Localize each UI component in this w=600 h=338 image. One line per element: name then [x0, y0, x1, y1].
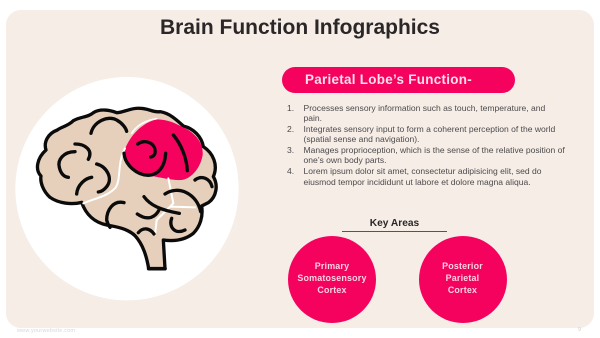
item 1: [287, 102, 545, 123]
brain outline: [37, 108, 216, 269]
item 2: Integrates sensory input to form a coherent perception of the world: [304, 124, 555, 134]
illustration: brain in white circle: [16, 77, 238, 300]
item 4: 4.: [287, 166, 294, 176]
parietal lobe highlight: [124, 119, 203, 180]
circle: Primary Somatosensory Cortex: Somatosensory: [297, 272, 367, 282]
item 4: Lorem ipsum dolor sit amet, consectetur adipisicing elit, sed do: [304, 166, 542, 176]
circle: Primary Somatosensory Cortex: [288, 236, 376, 322]
item 2: [287, 124, 555, 144]
circle: Primary Somatosensory Cortex: Primary: [315, 260, 349, 270]
stem base: [149, 263, 165, 274]
heading: Key Areas: Key Areas: [370, 218, 419, 229]
white lobe dividers: [83, 148, 195, 235]
circle: Posterior Parietal Cortex: Parietal: [446, 272, 479, 282]
item 1: pain.: [304, 113, 322, 123]
item 2: (spatial sense and navigation).: [304, 134, 419, 144]
footer: page number: 9: [578, 327, 581, 333]
item 1: Processes sensory information such as touch, temperature, and: [304, 102, 545, 112]
icon: brain: [37, 108, 216, 269]
heading pill: Parietal Lobe's Function: [282, 67, 515, 93]
item 3: Manages proprioception, which is the sense of the relative position of: [304, 145, 565, 155]
title: Brain Function Infographics: [160, 16, 440, 38]
circle: Posterior Parietal Cortex: Posterior: [442, 260, 483, 270]
sulci curves: [59, 118, 212, 234]
white circle: [15, 77, 239, 300]
item 2: 2.: [287, 124, 294, 134]
heading pill: Parietal Lobe's Function: Parietal Lobe’s Function-: [305, 72, 472, 87]
item 1: 1.: [287, 102, 294, 112]
underline: Key Areas: [342, 231, 447, 232]
item 4: [287, 166, 542, 187]
footer: website: www.yourwebsite.com: [17, 328, 75, 334]
circle: Posterior Parietal Cortex: Cortex: [448, 284, 477, 294]
item 3: 3.: [287, 145, 294, 155]
circle: Posterior Parietal Cortex: [418, 236, 506, 322]
item 4: eiusmod tempor incididunt ut labore et dolore magna aliqua.: [304, 177, 531, 187]
list: functions: [287, 102, 565, 187]
item 3: [287, 145, 565, 165]
circle: Primary Somatosensory Cortex: Cortex: [317, 284, 347, 294]
item 3: one’s own body parts.: [304, 155, 386, 165]
